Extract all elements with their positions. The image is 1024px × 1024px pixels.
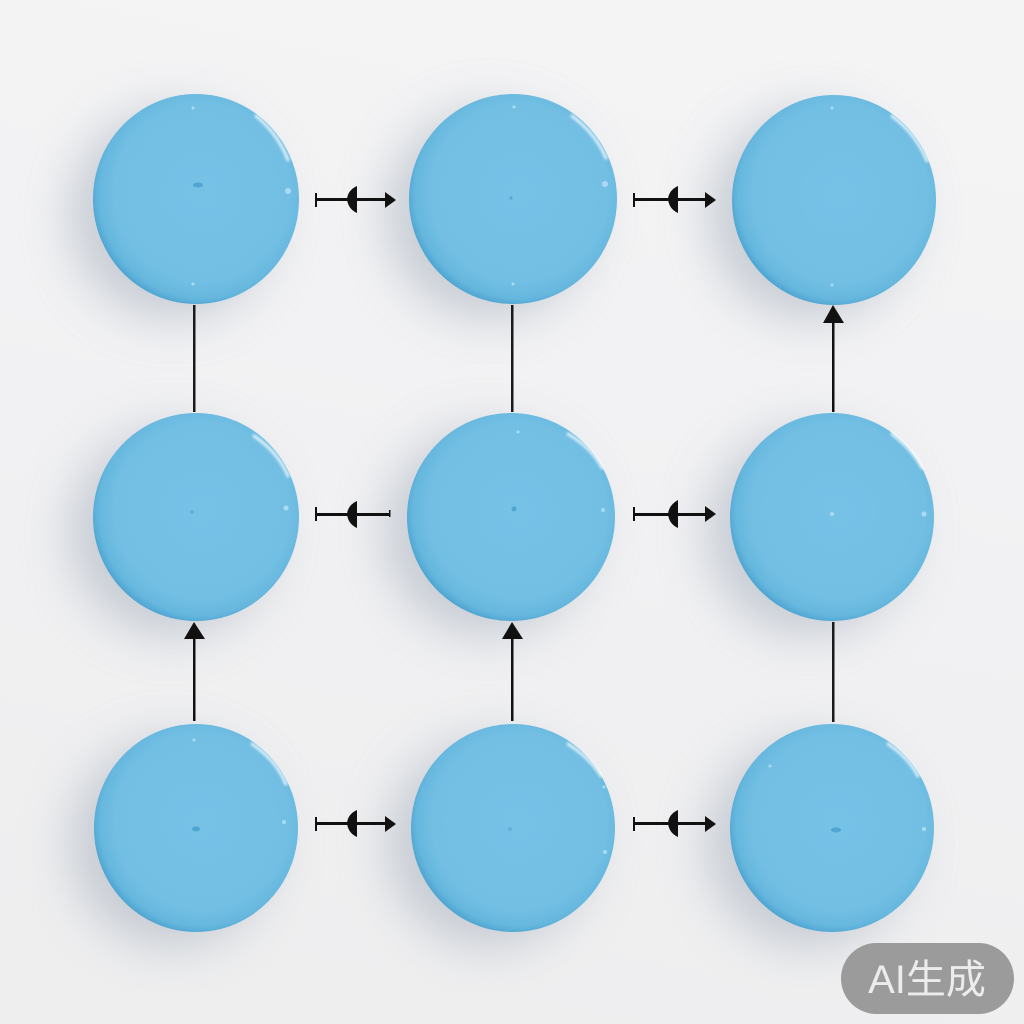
disc row 3 column 2 — [387, 724, 615, 947]
connector: column 3 rows 2 to 3 — [832, 622, 834, 722]
disc row 2 column 2 — [383, 413, 615, 636]
arrow: column 3 row 2 up to row 1 — [823, 305, 844, 412]
badge: AI generated: AI生成 — [868, 958, 986, 1002]
disc row 1 column 1 — [69, 94, 299, 319]
arrow: row 3 column 2 to 3 — [633, 810, 716, 837]
arrow: row 3 column 1 to 2 — [315, 810, 396, 837]
connector: column 2 rows 1 to 2 — [511, 305, 514, 412]
badge: AI generated — [841, 943, 1014, 1014]
arrow: row 2 column 1 to 2 — [315, 501, 390, 528]
disc row 2 column 3 — [706, 413, 934, 636]
disc row 1 column 2 — [385, 94, 617, 319]
arrow: row 1 column 2 to 3 — [633, 186, 716, 213]
arrow: column 2 row 3 up to row 2 — [502, 622, 523, 721]
arrow: row 2 column 2 to 3 — [633, 500, 716, 528]
connector: column 1 rows 1 to 2 — [193, 305, 196, 412]
disc row 3 column 3 — [706, 724, 934, 947]
disc row 3 column 1 — [70, 724, 298, 947]
disc row 1 column 3 — [708, 95, 936, 320]
disc row 2 column 1 — [69, 413, 299, 636]
arrow: row 1 column 1 to 2 — [315, 186, 396, 213]
arrow: column 1 row 3 up to row 2 — [184, 622, 205, 721]
